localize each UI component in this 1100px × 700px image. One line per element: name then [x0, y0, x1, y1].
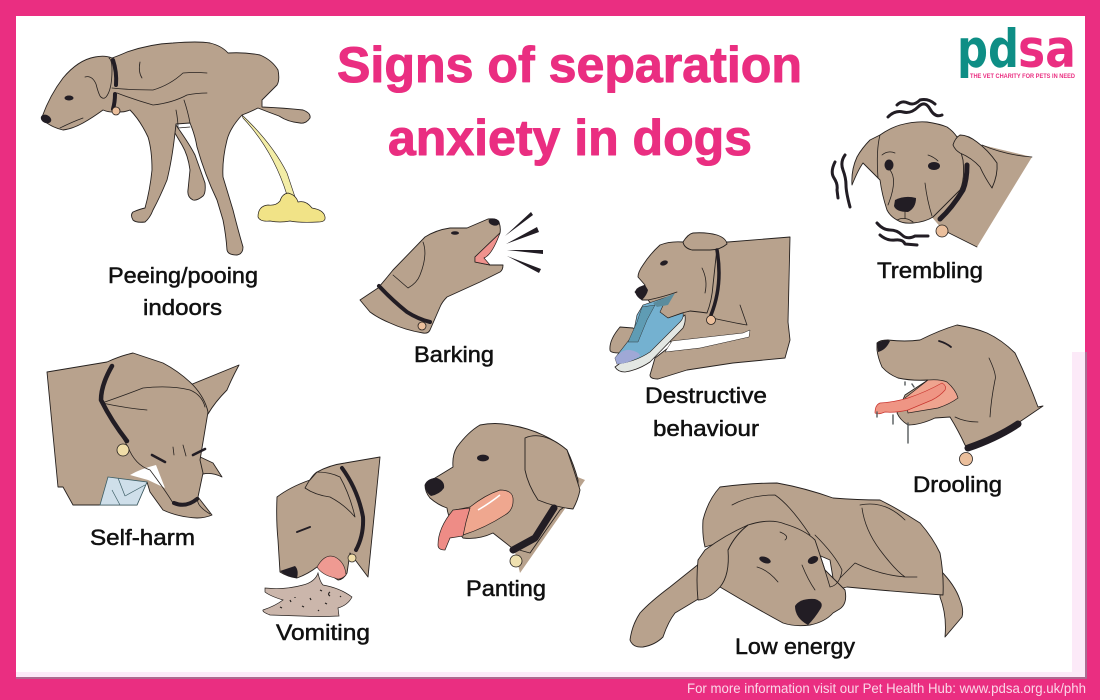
mouth [317, 556, 346, 579]
tag [960, 452, 972, 466]
eye [451, 231, 459, 235]
drool [877, 382, 914, 443]
label: peeing: Peeing/pooing [108, 263, 258, 288]
label: peeing [108, 263, 258, 320]
inner mouth highlight [478, 495, 500, 510]
tongue [875, 383, 946, 414]
eye [64, 96, 74, 100]
bandage [100, 477, 147, 505]
neck back [512, 470, 585, 573]
tongue [438, 508, 470, 550]
eye [939, 341, 951, 347]
toe [615, 350, 640, 364]
nose [488, 217, 500, 227]
nose [280, 566, 298, 578]
ear [683, 233, 727, 250]
nose [877, 340, 890, 352]
label: destructive: behaviour [653, 416, 759, 441]
ear [305, 472, 355, 517]
tag [706, 316, 716, 324]
nose [39, 113, 53, 125]
collar [101, 366, 127, 441]
mouth [60, 118, 83, 128]
body [703, 483, 943, 595]
open mouth [475, 233, 500, 265]
dog: panting [425, 424, 585, 573]
neck [930, 135, 1032, 247]
body [650, 237, 790, 379]
sound lines [505, 212, 543, 273]
label: panting: Panting [466, 576, 546, 601]
label: vomiting: Vomiting [276, 620, 370, 645]
ear line [955, 358, 995, 422]
mouth [648, 292, 677, 300]
tail [940, 570, 963, 637]
arm [630, 563, 700, 647]
body [42, 42, 310, 255]
nose [425, 478, 444, 496]
eye [297, 527, 310, 532]
label: peeing: indoors [143, 295, 222, 320]
title: anxiety in dogs [388, 110, 752, 166]
dog: barking [360, 212, 543, 333]
specks [280, 590, 341, 611]
white gap under chest [665, 330, 750, 352]
label: trembling: Trembling [877, 258, 983, 283]
eye [477, 455, 489, 461]
eye [659, 259, 669, 267]
collar [379, 286, 430, 322]
brows [882, 152, 938, 216]
footer text: For more information visit our Pet Health Hub: www.pdsa.org.uk/phh [687, 681, 1086, 696]
ear [525, 436, 580, 509]
dog: self-harm [47, 353, 239, 518]
head [877, 325, 1043, 448]
upper [615, 297, 683, 364]
lifted shoulder lines [112, 72, 207, 90]
urine stream [242, 115, 297, 203]
collar [113, 60, 116, 109]
dog: vomiting [263, 457, 380, 616]
dog: peeing [39, 42, 325, 255]
head [425, 424, 578, 553]
dog: low energy [630, 483, 963, 647]
laces [628, 305, 655, 342]
logo: pdsa: sa [1018, 19, 1076, 80]
left ear [697, 525, 748, 600]
label: destructive [645, 383, 767, 441]
head line [102, 387, 205, 503]
shake lines [832, 100, 942, 245]
tag [510, 555, 522, 567]
head [852, 122, 964, 223]
body lines [732, 495, 917, 578]
far front leg [172, 122, 205, 200]
body [277, 457, 380, 580]
tag [936, 225, 948, 237]
body [47, 353, 212, 518]
collar [940, 165, 967, 219]
mouth [897, 212, 913, 222]
label: low energy: Low energy [735, 634, 855, 659]
title: Signs of separation [337, 37, 802, 93]
mouth inside [905, 380, 958, 413]
tag [348, 554, 356, 562]
nose [795, 599, 822, 625]
nose [174, 499, 197, 505]
right ear [815, 535, 842, 587]
eyes [758, 555, 772, 565]
right ear [190, 365, 239, 414]
label: drooling: Drooling [913, 472, 1002, 497]
head [720, 521, 846, 626]
label: barking: Barking [414, 342, 494, 367]
nose [635, 285, 648, 300]
mouth inside [455, 490, 513, 535]
shoe [615, 293, 685, 372]
eyes [884, 160, 894, 170]
white gap [130, 465, 165, 488]
head [635, 242, 717, 318]
dog: trembling [832, 100, 1032, 247]
tag [112, 107, 120, 115]
left ear line [877, 135, 880, 178]
collar [711, 250, 719, 315]
eyes [152, 449, 205, 462]
nose wrinkles [173, 445, 210, 514]
far paw [610, 327, 660, 353]
dog: destructive [610, 233, 790, 379]
right ear [953, 135, 997, 188]
label: destructive: Destructive [645, 383, 767, 408]
sole [615, 315, 685, 372]
logo: pdsa: THE VET CHARITY FOR PETS IN NEED [970, 74, 1076, 80]
head and neck [360, 219, 503, 333]
puddle [258, 193, 325, 222]
collar [513, 508, 554, 550]
label: self-harm: Self-harm [90, 525, 195, 550]
tag [418, 322, 426, 330]
tag [117, 444, 129, 456]
collar [342, 468, 363, 550]
dog: drooling [875, 325, 1043, 466]
ear [85, 58, 112, 98]
logo: pdsa: pd [957, 19, 1019, 80]
cheek and shoulder lines [702, 268, 747, 325]
vomit [263, 573, 352, 616]
shoe tongue [653, 293, 675, 307]
logo: pdsa [957, 19, 1076, 80]
nose [894, 197, 916, 212]
ear [393, 242, 425, 288]
far paw [196, 455, 222, 480]
title [337, 37, 802, 166]
collar [968, 424, 1018, 448]
